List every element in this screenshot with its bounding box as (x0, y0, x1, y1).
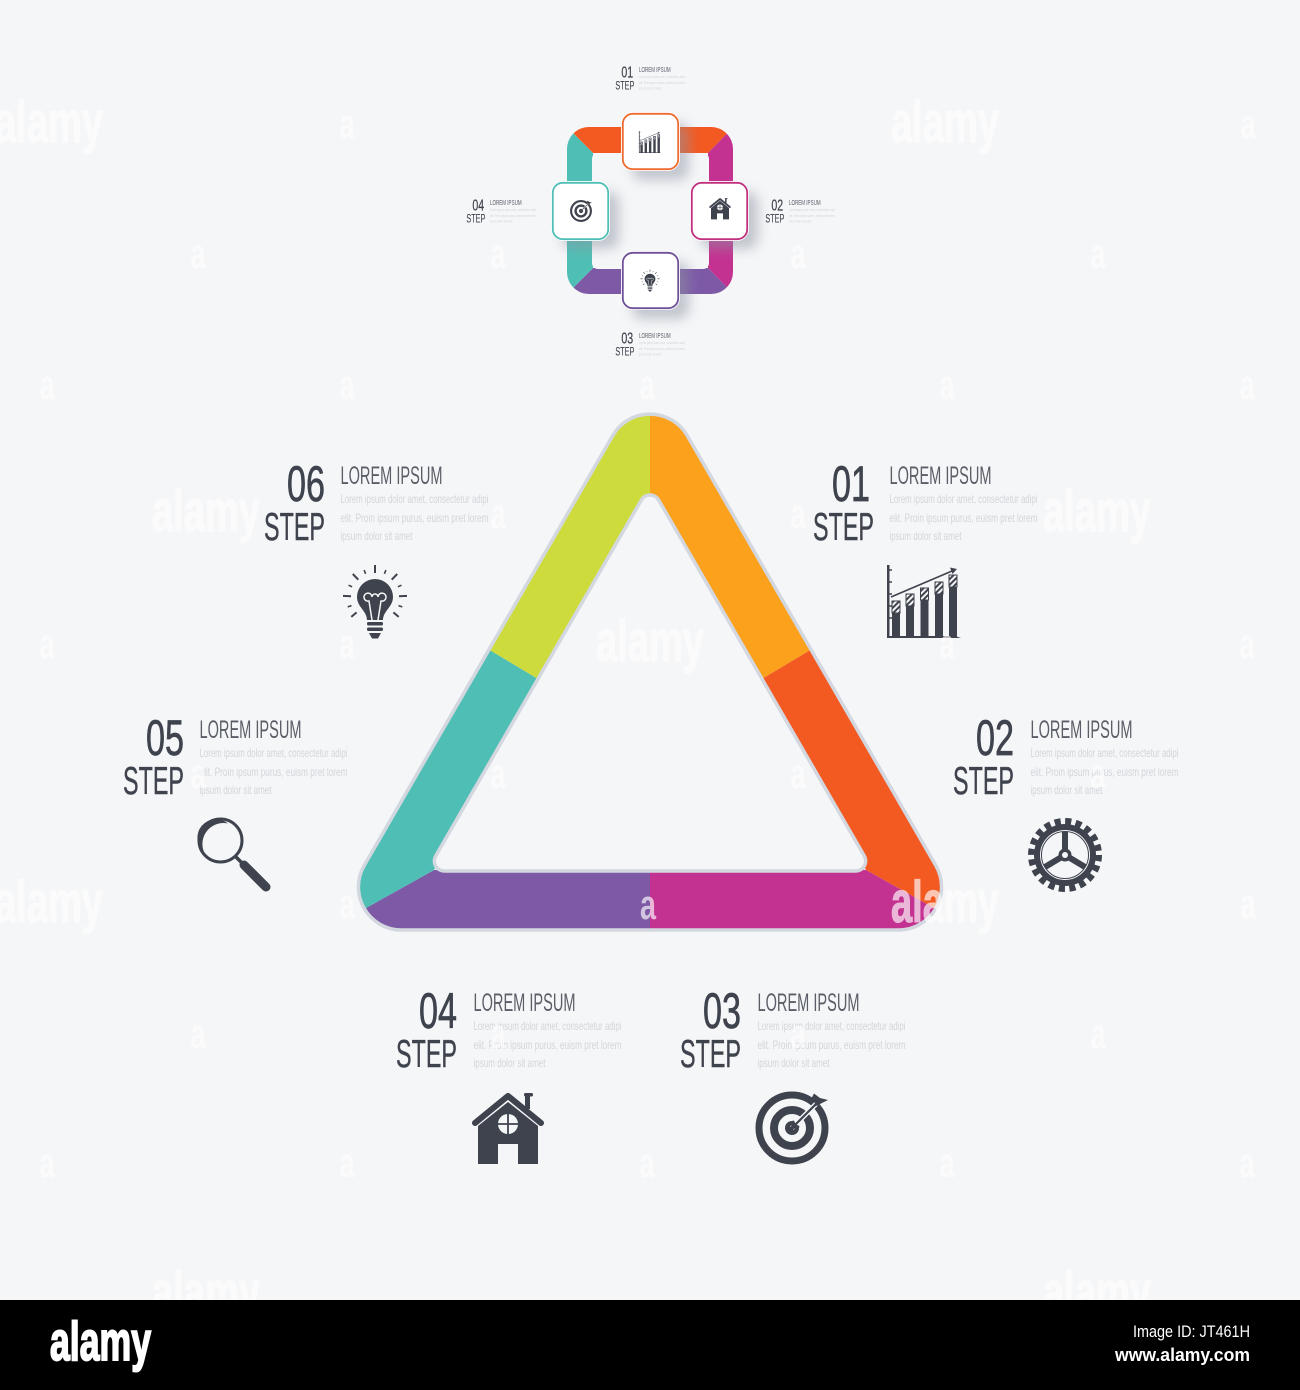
step 03 block: STEP (680, 1033, 741, 1076)
small label: step 01: elit. Proin ipsum purus, euism pret lorem (639, 81, 685, 85)
small label: step 01: STEP (615, 78, 634, 92)
small label: step 02: ipsum dolor sit amet (789, 219, 811, 223)
step 01 block (813, 456, 1038, 549)
watermark layer: a (340, 361, 355, 408)
icon: bar chart (887, 565, 961, 638)
footer bar (0, 1300, 1300, 1390)
watermark layer: a (790, 1010, 806, 1057)
segment: lime (490, 416, 650, 678)
step 03 block (680, 983, 906, 1076)
small label: step 01: LOREM IPSUM (639, 65, 671, 74)
watermark layer: a (1240, 361, 1255, 408)
step 06 block: STEP (264, 506, 325, 549)
small label: step 04: elit. Proin ipsum purus, euism pret lorem (490, 214, 536, 218)
card: step 04 target (551, 181, 610, 241)
watermark layer: a (340, 880, 355, 927)
small label: step 02: elit. Proin ipsum purus, euism pret lorem (789, 214, 835, 218)
watermark layer: a (940, 620, 955, 667)
ring of four colored segments (567, 127, 733, 294)
icon: gear (1032, 822, 1098, 888)
step 01 block: 01 (832, 456, 870, 512)
step 01 block: LOREM IPSUM (890, 462, 992, 490)
small label: step 03: ipsum dolor sit amet (639, 352, 661, 356)
step 05 block: Lorem ipsum dolor amet, consectetur adipi (200, 746, 348, 760)
watermark layer: a (1090, 1010, 1106, 1057)
small label: step 01: 01 (621, 64, 633, 81)
watermark layer: alamy (891, 870, 999, 935)
small label: step 04: 04 (472, 197, 484, 214)
small label: step 02: Lorem ipsum dolor amet, consectetur adipi (789, 208, 835, 212)
step 01 block: Lorem ipsum dolor amet, consectetur adipi (890, 492, 1038, 506)
watermark layer: a (1090, 230, 1106, 277)
small label: step 03: STEP (615, 344, 634, 358)
step 02 block: Lorem ipsum dolor amet, consectetur adipi (1030, 746, 1178, 760)
small label: step 01 (615, 64, 685, 92)
footer logo: alamy (50, 1310, 151, 1372)
watermark layer: a (1240, 1139, 1255, 1186)
step 04 block (396, 983, 622, 1076)
small label: step 01: Lorem ipsum dolor amet, consectetur adipi (639, 75, 685, 79)
step 02 block: ipsum dolor sit amet (1030, 783, 1103, 797)
small diagram: rounded square with four steps (466, 64, 835, 358)
icon: light bulb (343, 565, 407, 638)
step 06 block: LOREM IPSUM (340, 462, 442, 490)
step 03 block: 03 (703, 983, 741, 1039)
step 05 block: 05 (146, 710, 184, 766)
step 04 block: 04 (419, 983, 457, 1039)
small label: step 04: Lorem ipsum dolor amet, consectetur adipi (490, 208, 536, 212)
watermark layer: a (490, 750, 506, 797)
small label: step 02: 02 (771, 197, 783, 214)
small label: step 03: LOREM IPSUM (639, 331, 671, 340)
segment: red-orange (764, 650, 940, 908)
watermark layer: a (190, 1010, 206, 1057)
step 05 block: STEP (123, 760, 184, 803)
step 03 block: Lorem ipsum dolor amet, consectetur adipi (758, 1019, 906, 1033)
small label: step 03: Lorem ipsum dolor amet, consectetur adipi (639, 341, 685, 345)
watermark layer: a (490, 490, 506, 537)
watermark layer: a (640, 881, 656, 928)
step 05 block: LOREM IPSUM (200, 716, 302, 744)
watermark layer: a (1240, 880, 1256, 927)
watermark layer: a (790, 230, 806, 277)
watermark layer: a (940, 361, 955, 408)
step 01 block: STEP (813, 506, 874, 549)
segment: teal (360, 650, 536, 908)
watermark layer: alamy (1043, 1260, 1151, 1325)
small label: step 02: LOREM IPSUM (789, 198, 821, 207)
watermark layer: alamy (152, 1260, 260, 1325)
watermark layer: a (490, 230, 506, 277)
watermark layer: a (490, 1010, 506, 1057)
small label: step 04 (466, 197, 536, 225)
step 01 block: ipsum dolor sit amet (890, 529, 962, 543)
step 02 block: elit. Proin ipsum purus, euism pret lorem (1030, 765, 1178, 779)
step 02 block (953, 710, 1178, 803)
small label: step 04: STEP (466, 211, 485, 225)
icon: house (475, 1093, 541, 1164)
step 04 block: elit. Proin ipsum purus, euism pret lorem (474, 1038, 622, 1052)
icon: target (759, 1094, 828, 1161)
step 01 block: elit. Proin ipsum purus, euism pret lorem (890, 511, 1038, 525)
step 06 block: 06 (287, 456, 325, 512)
step 04 block: Lorem ipsum dolor amet, consectetur adipi (474, 1019, 622, 1033)
watermark layer: alamy (1043, 479, 1151, 544)
small label: step 02 (765, 197, 835, 225)
small label: step 02: STEP (765, 211, 784, 225)
segment: orange (650, 416, 810, 678)
large triangle with six colored segments (356, 412, 944, 932)
watermark layer: a (40, 361, 55, 408)
step 04 block: ipsum dolor sit amet (474, 1056, 546, 1070)
watermark layer: a (40, 1139, 55, 1186)
step 06 block: elit. Proin ipsum purus, euism pret lorem (340, 511, 488, 525)
watermark layer: a (340, 620, 355, 667)
website: www.alamy.com (1114, 1345, 1250, 1365)
watermark layer: a (940, 1139, 955, 1186)
step 06 block (264, 456, 488, 549)
watermark layer: a (640, 361, 655, 408)
step 05 block (123, 710, 348, 803)
step 06 block: Lorem ipsum dolor amet, consectetur adipi (340, 492, 488, 506)
watermark layer: alamy (891, 90, 999, 155)
watermark layer: a (1240, 100, 1256, 147)
watermark layer: alamy (596, 609, 704, 674)
watermark layer: a (1090, 750, 1106, 797)
step 04 block: STEP (396, 1033, 457, 1076)
segment: purple (366, 870, 650, 928)
card: step 01 chart (621, 112, 680, 171)
small label: step 04: LOREM IPSUM (490, 198, 522, 207)
small label: step 04: ipsum dolor sit amet (490, 219, 512, 223)
small label: step 03 (615, 330, 685, 358)
small label: step 01: ipsum dolor sit amet (639, 86, 661, 90)
watermark layer: a (340, 100, 355, 147)
step 06 block: ipsum dolor sit amet (340, 529, 413, 543)
step 05 block: ipsum dolor sit amet (200, 783, 272, 797)
step 02 block: 02 (976, 710, 1014, 766)
watermark layer: a (190, 750, 206, 797)
watermark layer: alamy (152, 479, 260, 544)
step 04 block: LOREM IPSUM (474, 989, 576, 1017)
watermark layer: a (190, 230, 206, 277)
watermark layer: a (340, 1139, 355, 1186)
small label: step 03: elit. Proin ipsum purus, euism pret lorem (639, 347, 685, 351)
small label: step 03: 03 (621, 330, 633, 347)
card: step 02 house (690, 181, 749, 241)
step 05 block: elit. Proin ipsum purus, euism pret lorem (200, 765, 348, 779)
step 03 block: LOREM IPSUM (758, 989, 860, 1017)
watermark layer: a (790, 490, 806, 537)
watermark layer: a (640, 1139, 655, 1186)
step 03 block: ipsum dolor sit amet (758, 1056, 830, 1070)
step 02 block: LOREM IPSUM (1030, 716, 1132, 744)
watermark layer: a (1240, 620, 1255, 667)
image id: Image ID: JT461H (1133, 1322, 1250, 1341)
step 02 block: STEP (953, 760, 1014, 803)
segment: magenta (650, 870, 934, 928)
card: step 03 bulb (621, 251, 680, 310)
watermark layer: a (790, 750, 806, 797)
step 03 block: elit. Proin ipsum purus, euism pret lorem (758, 1038, 906, 1052)
card shadows (562, 123, 758, 319)
icon: magnifier (197, 819, 266, 887)
watermark layer: a (40, 620, 55, 667)
